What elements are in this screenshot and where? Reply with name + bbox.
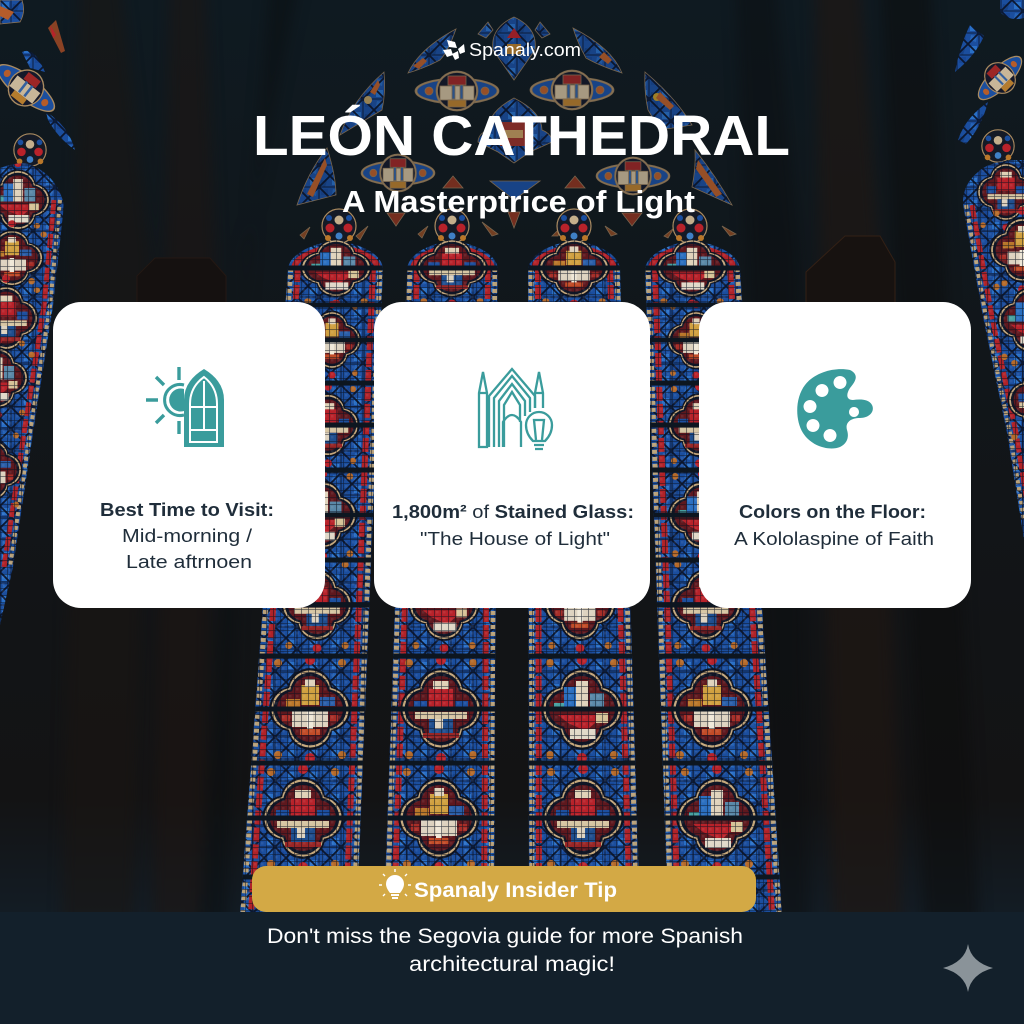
text: best time: Mid-morning /: [122, 525, 253, 546]
icon: sun and gothic window: [146, 367, 224, 447]
text: best time: Late aftrnoen: [126, 551, 252, 572]
text: colors: Colors on the Floor:: [739, 501, 926, 522]
icon: cathedral with light bulb: [479, 369, 552, 449]
text: best time: [100, 499, 274, 572]
icon: sparkle: [943, 944, 993, 992]
icon: lancet tops medallions: [322, 209, 707, 243]
icon: palette: [797, 369, 873, 448]
stained glass: left side window: [0, 0, 75, 630]
text: stained glass: [392, 501, 634, 549]
logo: Spanaly.com: Spanaly.com: [469, 39, 581, 60]
stained glass: central four lancets: [230, 209, 790, 920]
stained glass: upper tracery: [297, 17, 736, 240]
text: best time: Best Time to Visit:: [100, 499, 274, 520]
title: LEÓN CATHEDRAL: [253, 104, 790, 168]
subtitle: A Masterptrice of Light: [342, 184, 695, 219]
callout: Spanaly Insider Tip banner: Spanaly Insider Tip: [414, 879, 617, 902]
text: stained glass: "The House of Light": [420, 528, 610, 549]
text: stained glass: 1,800m² of Stained Glass:: [392, 501, 634, 522]
icon: light bulb: [379, 869, 411, 899]
callout: Spanaly Insider Tip banner: [252, 866, 756, 912]
panel: stained glass: [374, 302, 650, 608]
panel: colors on the floor: [699, 302, 971, 608]
text: colors: A Kololaspine of Faith: [734, 528, 934, 549]
bottom dark band: [0, 912, 1024, 1024]
text: closing note: [267, 924, 743, 976]
panel: best time to visit: [53, 302, 325, 608]
stained glass: right side window: [955, 0, 1024, 550]
text: colors: [734, 501, 934, 549]
icon: logo mark: [443, 40, 465, 60]
text: closing note: Don't miss the Segovia guide for more Spanish: [267, 924, 743, 948]
text: closing note: architectural magic!: [409, 952, 615, 976]
